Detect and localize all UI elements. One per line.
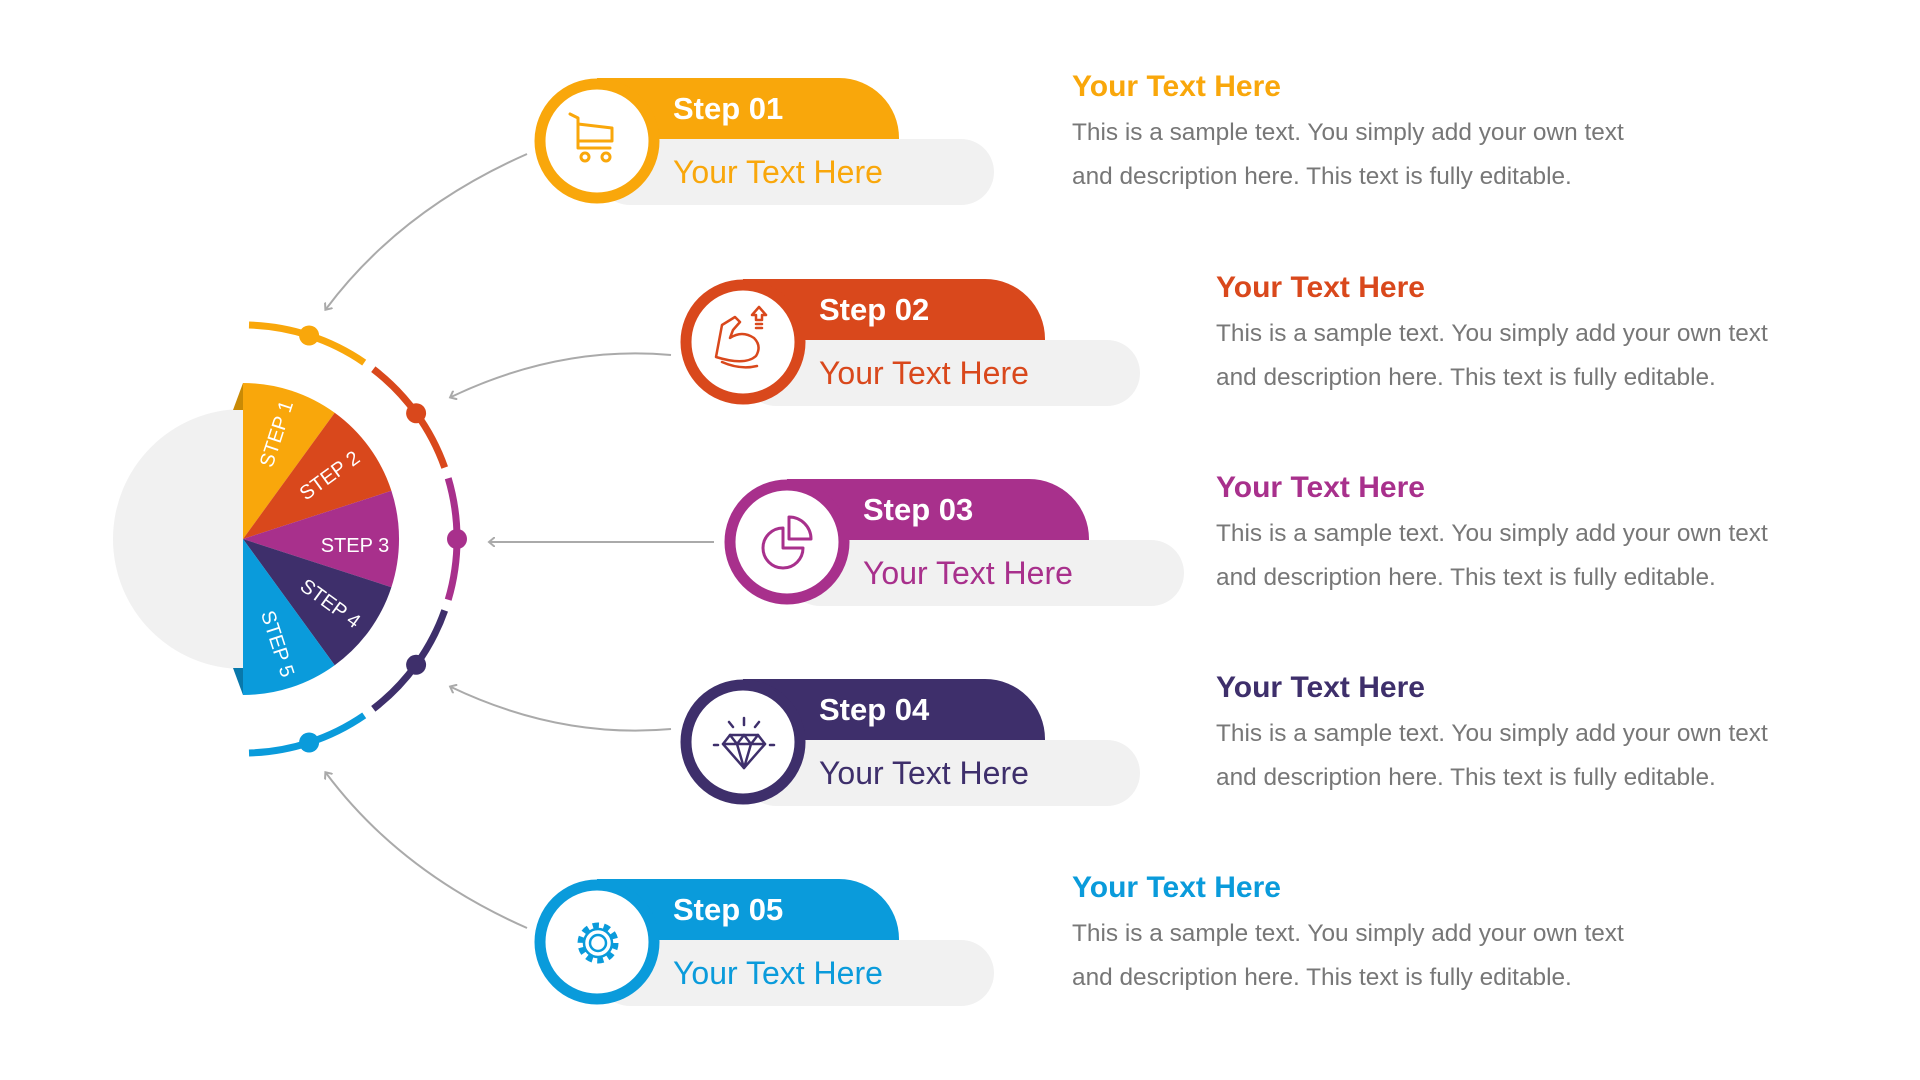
pie slices — [243, 383, 399, 695]
card: step 04: Step 04 — [819, 692, 930, 727]
card: step 03: Step 03 — [863, 492, 973, 527]
arrows — [326, 154, 714, 928]
ring dots — [299, 326, 467, 752]
text block 5: Your Text Here — [1072, 871, 1281, 904]
text block 1: This is a sample text. You simply add your own text — [1072, 119, 1624, 146]
icon: muscle — [716, 307, 766, 367]
text block 3: Your Text Here — [1216, 471, 1425, 504]
text block 5: This is a sample text. You simply add your own text — [1072, 920, 1624, 947]
card: step 01: Your Text Here — [673, 154, 883, 190]
outer ring segments — [249, 325, 457, 753]
pie labels: STEP 2 — [296, 447, 364, 505]
pie labels: STEP 5 — [256, 608, 298, 680]
text block 1 — [1072, 70, 1624, 190]
fold shadows — [233, 383, 243, 410]
icon: gear — [581, 926, 615, 960]
card: step 02 — [686, 279, 1140, 406]
text block 2: and description here. This text is fully editable. — [1216, 364, 1716, 391]
card: step 04: Your Text Here — [819, 755, 1029, 791]
icon: cart — [570, 114, 612, 161]
pie labels: STEP 1 — [256, 398, 298, 470]
card: step 03: Your Text Here — [863, 555, 1073, 591]
text block 4 — [1216, 671, 1768, 791]
icon: pie chart — [763, 517, 811, 568]
card: step 02: Step 02 — [819, 292, 929, 327]
text block 3: This is a sample text. You simply add your own text — [1216, 520, 1768, 547]
text block 4: Your Text Here — [1216, 671, 1425, 704]
left wheel — [113, 325, 467, 753]
text block 3: and description here. This text is fully editable. — [1216, 564, 1716, 591]
pie labels: STEP 3 — [321, 535, 389, 557]
text block 1: and description here. This text is fully editable. — [1072, 163, 1572, 190]
text block 3 — [1216, 471, 1768, 591]
text block 5 — [1072, 871, 1624, 991]
text block 4: and description here. This text is fully editable. — [1216, 764, 1716, 791]
text block 1: Your Text Here — [1072, 70, 1281, 103]
card: step 05: Your Text Here — [673, 955, 883, 991]
text block 2: Your Text Here — [1216, 271, 1425, 304]
card: step 04 — [686, 679, 1140, 806]
gray half circle background — [113, 409, 373, 669]
text block 2 — [1216, 271, 1768, 391]
pie labels — [256, 398, 389, 680]
card: step 01: Step 01 — [673, 91, 783, 126]
card: step 05 — [540, 879, 994, 1006]
card: step 03 — [730, 479, 1184, 606]
icon: diamond — [714, 718, 774, 768]
text block 4: This is a sample text. You simply add your own text — [1216, 720, 1768, 747]
text block 2: This is a sample text. You simply add your own text — [1216, 320, 1768, 347]
card: step 02: Your Text Here — [819, 355, 1029, 391]
pie labels: STEP 4 — [296, 575, 364, 633]
text block 5: and description here. This text is fully editable. — [1072, 964, 1572, 991]
card: step 01 — [540, 78, 994, 205]
card: step 05: Step 05 — [673, 892, 783, 927]
